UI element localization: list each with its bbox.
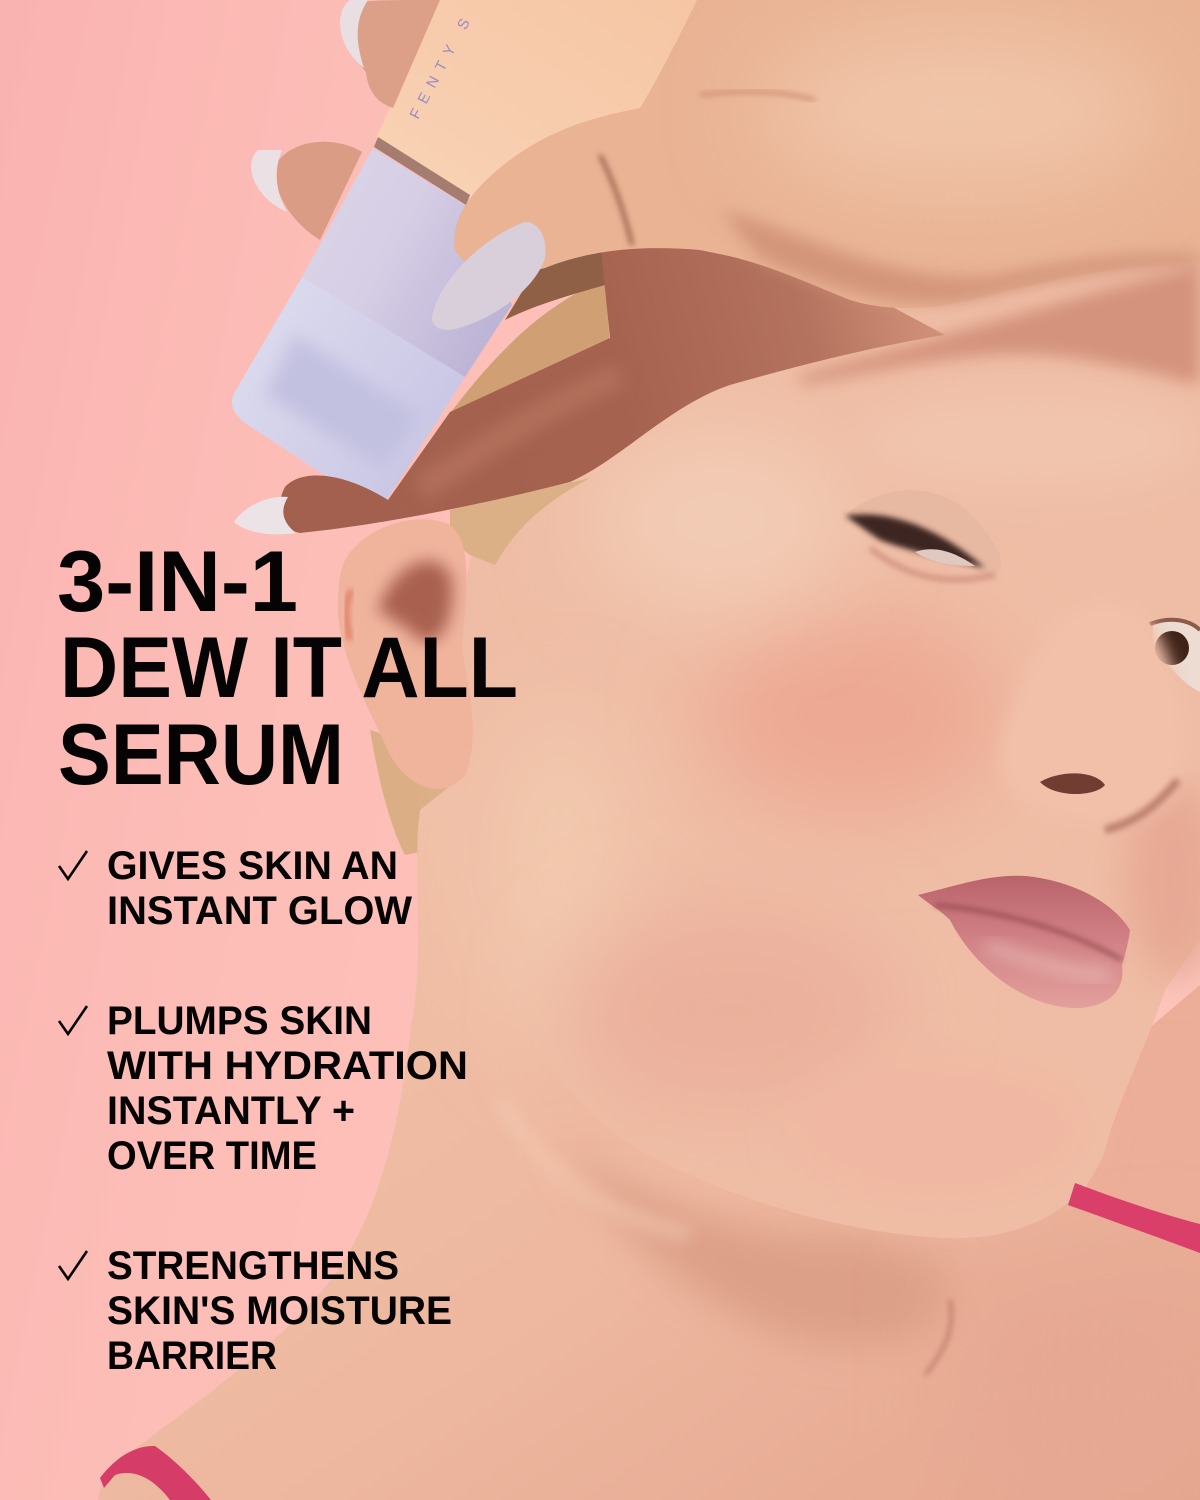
brand on tube: FENTY S: [407, 9, 477, 122]
neck and chest: [98, 770, 1200, 1500]
second finger behind bottle: [275, 142, 362, 240]
benefit 2 text: PLUMPS SKIN: [107, 999, 372, 1043]
benefit 1: [59, 844, 412, 933]
upper cap: [302, 148, 512, 377]
knuckle crease: [700, 92, 815, 100]
heading: [57, 534, 518, 803]
icon: check mark: [59, 1251, 87, 1279]
hair tuft by ear: [450, 478, 590, 565]
nail second: [251, 150, 287, 212]
benefit 3 text: STRENGTHENS: [107, 1244, 399, 1288]
photo: hand: [234, 0, 1200, 534]
lower cap: [232, 277, 465, 502]
thumb nail: [432, 222, 546, 330]
benefit 2 text: OVER TIME: [107, 1134, 317, 1178]
product: serum bottle: [232, 0, 697, 502]
nose: [1000, 603, 1184, 830]
second eye: [1150, 620, 1200, 692]
inner capsule: [265, 335, 420, 470]
shoulder and arm behind face: [1060, 985, 1200, 1500]
lower finger highlight: [420, 375, 620, 490]
ear: [338, 519, 473, 789]
metal ring: [374, 137, 470, 205]
heading: SERUM: [58, 707, 344, 803]
neck shadows: [500, 1100, 1200, 1500]
hair above finger: [445, 280, 610, 425]
benefit 3 text: [107, 1244, 452, 1378]
benefit 3: [59, 1244, 452, 1378]
hand shading: [720, 210, 1200, 303]
thumb crease: [600, 155, 632, 245]
lips: [918, 876, 1130, 1008]
benefit 3 text: BARRIER: [107, 1334, 277, 1378]
lower nail: [234, 497, 296, 534]
back of hand and thumb: [454, 0, 1200, 308]
finger behind bottle top: [345, 0, 440, 108]
closed eye: [845, 490, 1001, 580]
heading: 3-IN-1: [57, 534, 298, 630]
hair behind ear: [370, 730, 470, 855]
heading: DEW IT ALL: [60, 620, 518, 716]
nail top: [340, 0, 368, 68]
benefit 1 text: INSTANT GLOW: [107, 889, 412, 933]
benefit 2 text: INSTANTLY +: [107, 1089, 355, 1133]
face: [460, 240, 1200, 1238]
benefit 2: [59, 999, 468, 1178]
benefit 3 text: SKIN'S MOISTURE: [107, 1289, 452, 1333]
face shading: [490, 265, 1200, 1205]
benefit 1 text: GIVES SKIN AN: [107, 844, 398, 888]
benefit 2 text: [107, 999, 468, 1178]
icon: check mark: [59, 1006, 87, 1034]
strap right: [1068, 1183, 1200, 1253]
shadow between thumb and hair: [505, 240, 605, 320]
benefit 2 text: WITH HYDRATION: [107, 1044, 468, 1088]
icon: check mark: [59, 851, 87, 879]
lower finger and palm: [280, 240, 945, 533]
hand highlight: [760, 30, 1160, 190]
photo: model: [98, 240, 1200, 1500]
strap left: [100, 1446, 211, 1500]
tube: [376, 0, 697, 200]
benefit 1 text: [107, 844, 412, 933]
